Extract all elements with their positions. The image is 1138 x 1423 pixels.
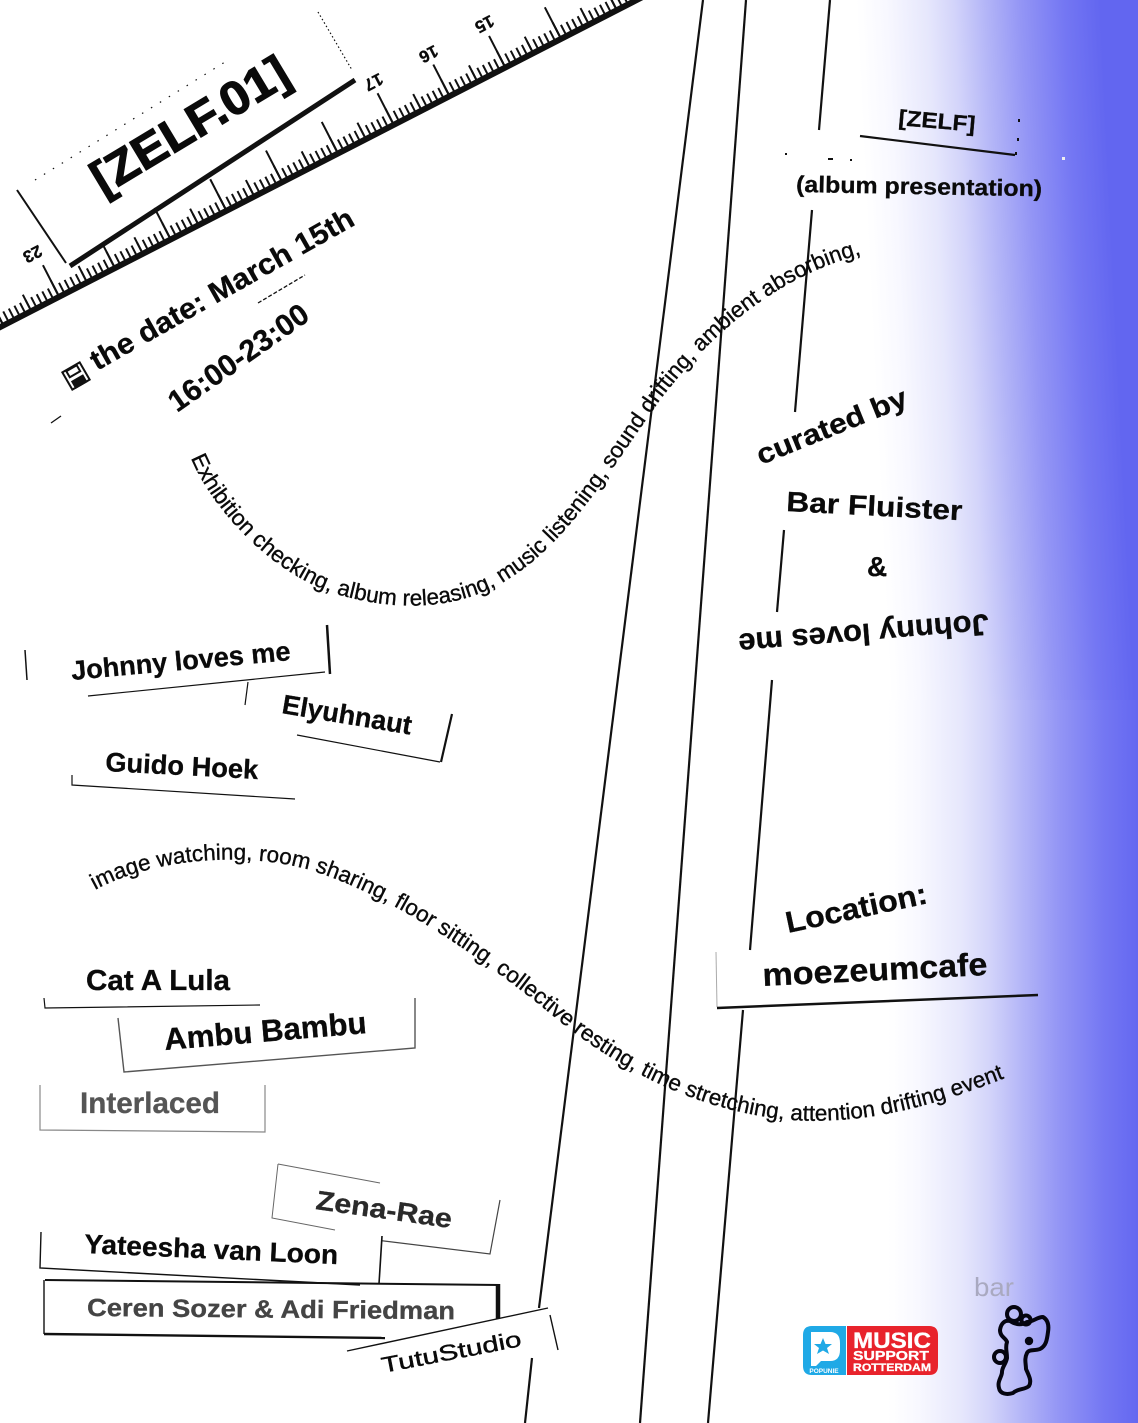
time: 16:00-23:00 (162, 298, 315, 419)
heading: ZELF: [ZELF] (898, 105, 976, 137)
artist label: Elyuhnaut (280, 689, 452, 762)
ruler number 23: 23 (20, 241, 45, 267)
curated by: curated by (752, 382, 912, 471)
artist label: Zena-Rae: Zena-Rae (314, 1185, 454, 1234)
title label: ZELF.01 (17, 12, 355, 266)
icon: floppy disk (62, 362, 90, 390)
artist label: Guido Hoek: Guido Hoek (105, 747, 260, 785)
ruler number 17: 17 (361, 69, 386, 95)
icon: Bar Fluister blob (994, 1307, 1048, 1394)
artist label: TutuStudio: TutuStudio (379, 1326, 523, 1378)
Bar Fluister: Bar Fluister (786, 486, 963, 526)
artist label: Cat A Lula: Cat A Lula (86, 965, 231, 997)
bar wordmark: bar (974, 1272, 1014, 1302)
artist label: Guido Hoek (72, 747, 295, 799)
logo: Music Support Rotterdam (847, 1326, 938, 1375)
title label: ZELF.01: [ZELF.01] (81, 45, 298, 205)
logo: Music Support Rotterdam: SUPPORT (853, 1349, 929, 1363)
artist label: Yateesha van Loon (40, 1229, 382, 1285)
logo: Music Support Rotterdam: ROTTERDAM (853, 1362, 931, 1374)
logo: Music Support Rotterdam: MUSIC (853, 1328, 931, 1353)
ruler (0, 0, 675, 355)
logo: Popunie: POPUNIE (809, 1368, 839, 1375)
date: the date: March 15th (85, 202, 360, 377)
artist label: Elyuhnaut: Elyuhnaut (280, 689, 414, 741)
Location: Location: (783, 878, 930, 940)
curved text: exhibition: Exhibition checking, album releasing, music listening, sound drifting, ambient absorbing, (191, 244, 860, 606)
artist label: Interlaced: Interlaced (80, 1087, 220, 1120)
ruler number 15: 15 (472, 11, 497, 37)
specks (785, 119, 1065, 161)
venue label: moezeumcafe (716, 946, 1038, 1008)
Johnny loves me, upside down: Johnny loves me (737, 607, 990, 660)
ampersand: & (867, 551, 887, 582)
ruler number 16: 16 (416, 41, 441, 67)
venue label: moezeumcafe: moezeumcafe (762, 946, 988, 993)
artist label: Johnny loves me: Johnny loves me (70, 636, 292, 686)
artist label: Ceren Sozer and Adi Friedman: Ceren Sozer & Adi Friedman (87, 1294, 455, 1325)
artist label: Ceren Sozer and Adi Friedman (44, 1280, 500, 1338)
artist label: Yateesha van Loon: Yateesha van Loon (84, 1229, 339, 1270)
logo: Popunie (803, 1326, 846, 1375)
curved text: image watching: image watching, room sharing, floor sitting, collective resting, time stretching, attention drifting event (88, 843, 1005, 1123)
artist label: Interlaced (40, 1085, 265, 1132)
artist label: Ambu Bambu (118, 998, 415, 1072)
artist label: Cat A Lula (44, 965, 260, 1008)
heading: ZELF (860, 105, 1015, 155)
artist label: Johnny loves me (25, 625, 330, 705)
date specks (51, 275, 305, 423)
album presentation: (album presentation) (796, 171, 1042, 201)
artist label: Zena-Rae (272, 1164, 500, 1254)
artist label: Ambu Bambu: Ambu Bambu (163, 1005, 368, 1057)
vertical lines (525, 0, 830, 1423)
artist label: TutuStudio (347, 1308, 558, 1388)
